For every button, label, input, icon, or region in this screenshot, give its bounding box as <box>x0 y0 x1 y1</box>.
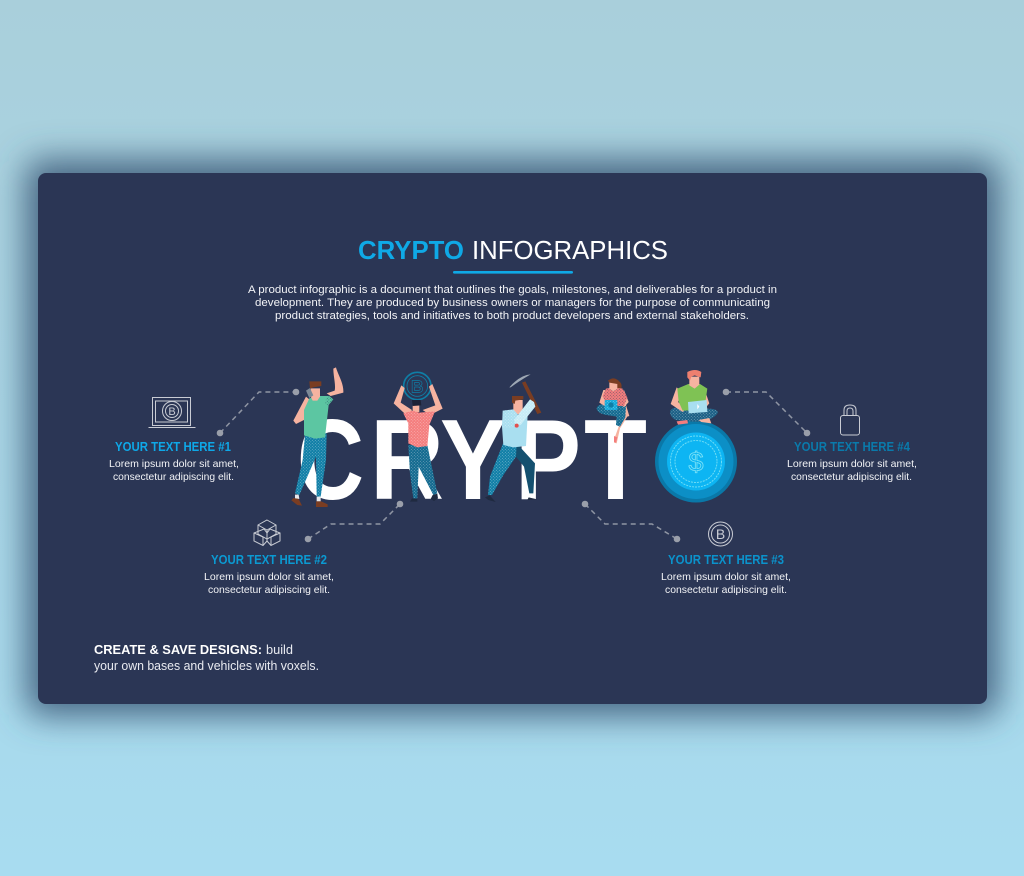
connector line 1 <box>217 389 299 436</box>
text block 2: YOUR TEXT HERE #2 <box>211 553 327 567</box>
connector line 3 <box>582 501 680 542</box>
text block 4: consectetur adipiscing elit. <box>791 471 912 483</box>
icon: stacked cubes <box>254 520 280 546</box>
intro text block <box>248 284 777 322</box>
figure: person lifting bitcoin coin: B <box>411 376 424 396</box>
title underline <box>453 271 573 274</box>
panel: dark slide <box>38 173 987 704</box>
title: CRYPTO <box>358 235 464 265</box>
big word CRYPTO letters <box>297 397 647 524</box>
big word CRYPTO letters: Y <box>440 397 506 524</box>
figure: woman sitting on letter T with tablet <box>597 378 629 443</box>
big word CRYPTO letters: R <box>370 397 444 524</box>
connector line 4 <box>723 389 810 436</box>
icon: laptop with bitcoin: B <box>168 406 176 418</box>
text block 1: consectetur adipiscing elit. <box>113 471 234 483</box>
text block 1: YOUR TEXT HERE #1 <box>115 440 231 454</box>
figure: person lifting bitcoin coin <box>394 372 443 502</box>
big word CRYPTO letters: P <box>515 397 581 524</box>
figure: man sitting on coin with laptop <box>670 370 718 425</box>
text block 4 <box>787 440 917 483</box>
text block 3: YOUR TEXT HERE #3 <box>668 553 784 567</box>
big word CRYPTO letters: C <box>297 397 364 524</box>
icon: bitcoin coin: B <box>716 526 725 542</box>
footer note: build <box>266 642 293 657</box>
big word CRYPTO letters: T <box>584 397 647 524</box>
text block 2: Lorem ipsum dolor sit amet, <box>204 571 334 583</box>
intro text block: development. They are produced by business owners or managers for the purpose of communicating <box>255 297 770 309</box>
text block 3 <box>661 553 791 596</box>
intro text block: product strategies, tools and initiatives to both product developers and external stakeholders. <box>275 310 749 322</box>
footer note: your own bases and vehicles with voxels. <box>94 658 319 673</box>
text block 2: consectetur adipiscing elit. <box>208 584 330 596</box>
intro text block: A product infographic is a document that outlines the goals, milestones, and deliverables for a product in <box>248 284 777 296</box>
text block 3: Lorem ipsum dolor sit amet, <box>661 571 791 583</box>
text block 4: YOUR TEXT HERE #4 <box>794 440 910 454</box>
icon: padlock <box>840 405 860 435</box>
connector line 2 <box>305 501 403 542</box>
figure: man in green shirt on phone <box>291 367 343 507</box>
icon: laptop with bitcoin <box>148 398 196 428</box>
coin forming letter O <box>655 420 737 502</box>
text block 1 <box>109 440 239 483</box>
icon: bitcoin coin <box>708 522 732 546</box>
title <box>358 235 668 265</box>
text block 1: Lorem ipsum dolor sit amet, <box>109 458 239 470</box>
text block 3: consectetur adipiscing elit. <box>665 584 787 596</box>
figure: miner with pickaxe <box>485 374 541 502</box>
footer note <box>94 642 319 673</box>
footer note: CREATE & SAVE DESIGNS: <box>94 642 262 657</box>
title: INFOGRAPHICS <box>472 235 668 265</box>
text block 2 <box>204 553 334 596</box>
text block 4: Lorem ipsum dolor sit amet, <box>787 458 917 470</box>
coin forming letter O: $ <box>688 447 704 477</box>
